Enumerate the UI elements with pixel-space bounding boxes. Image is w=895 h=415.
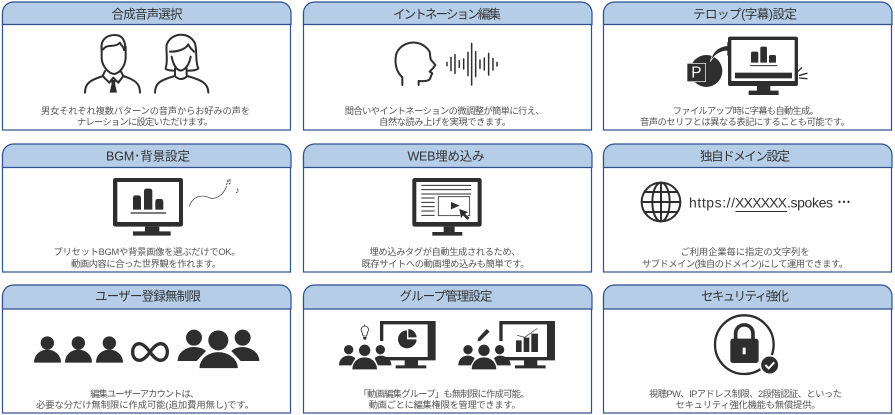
- heading: 独自ドメイン設定: [700, 150, 790, 164]
- icon: monitor with music notes: ♬: [225, 177, 234, 187]
- panel: ユーザー登録無制限: [2, 285, 291, 413]
- panel header: [2, 144, 291, 168]
- heading: グループ管理設定: [400, 288, 492, 304]
- heading: イントネーション編集: [393, 6, 501, 22]
- description: [640, 105, 850, 127]
- panel header: [604, 285, 892, 309]
- heading: テロップ(字幕)設定: [693, 8, 797, 22]
- description: サブドメイン(独自のドメイン)にして運用できます。: [642, 258, 848, 269]
- description: 必要な分だけ無制限に作成可能(追加費用無し)です。: [36, 399, 254, 410]
- description: セキュリティ強化機能も無償提供。: [676, 399, 820, 410]
- description: 音声のセリフとは異なる表記にすることも可能です。: [640, 116, 850, 127]
- panel header: [304, 2, 592, 24]
- description: [54, 246, 240, 269]
- description: 男女それぞれ複数パターンの音声からお好みの声を: [41, 105, 250, 116]
- panel header: [604, 144, 892, 168]
- description: [345, 105, 545, 127]
- icon: group with bar chart monitor: [458, 321, 555, 370]
- description: ナレーションに設定いただけます。: [77, 117, 213, 127]
- panel: テロップ（字幕）設定: [604, 2, 892, 130]
- icon: file to monitor with captions: [687, 37, 807, 95]
- description: [36, 388, 254, 410]
- icon: man and woman: [85, 35, 208, 93]
- domain url: [689, 194, 852, 212]
- panel: グループ管理設定: [304, 285, 592, 413]
- panel: 独自ドメイン設定: [604, 144, 892, 272]
- panel: 合成音声選択: [2, 2, 291, 130]
- description: 動画内容に合った世界観を作れます。: [71, 258, 221, 269]
- icon: monitor with music notes: ♪: [235, 185, 239, 195]
- panel header: [304, 144, 592, 168]
- description: 自然な読み上げを実現できます。: [379, 116, 511, 127]
- icon: monitor with embedded video: [412, 178, 482, 236]
- description: 編集ユーザーアカウントは、: [90, 388, 199, 399]
- panel: WEB埋め込み: [304, 144, 592, 272]
- description: 既存サイトへの動画埋め込みも簡単です。: [362, 258, 530, 269]
- icon: monitor with music notes: [113, 177, 239, 236]
- icon: group with pie chart monitor: [339, 321, 436, 370]
- description: 動画ごとに編集権限を管理できます。: [369, 399, 521, 410]
- icon: speaking head with waveform: [396, 42, 497, 85]
- domain url: ･･･: [836, 194, 852, 210]
- panel header: [2, 285, 291, 309]
- description: 「動画編集グループ」も無制限に作成可能。: [358, 388, 530, 399]
- description: [642, 246, 848, 269]
- panel: セキュリティ強化: [604, 285, 892, 413]
- description: ファイルアップ時に字幕も自動生成。: [673, 105, 819, 116]
- panel header: [604, 2, 892, 24]
- description: [358, 388, 530, 410]
- panel: イントネーション編集: [304, 2, 592, 130]
- icon: file to monitor with captions: P: [691, 65, 701, 82]
- panel header: [304, 285, 592, 309]
- description: 視聴PW、IPアドレス制限、2段階認証、といった: [649, 388, 842, 399]
- domain url: .spokes: [787, 194, 833, 210]
- icon: users and infinity: [34, 330, 259, 369]
- description: プリセットBGMや背景画像を選ぶだけでOK。: [54, 246, 240, 257]
- domain url: https://: [689, 194, 735, 210]
- heading: 合成音声選択: [112, 8, 183, 22]
- icon: globe: [642, 183, 680, 221]
- description: ご利用企業毎に指定の文字列を: [680, 246, 810, 257]
- description: 埋め込みタグが自動生成されるため、: [370, 246, 520, 257]
- description: [41, 105, 250, 127]
- panel: BGM・背景設定: [2, 144, 291, 272]
- heading: セキュリティ強化: [701, 290, 789, 304]
- domain url: XXXXXX: [735, 194, 788, 210]
- heading: BGM･背景設定: [106, 150, 190, 164]
- description: [649, 388, 842, 410]
- heading: ユーザー登録無制限: [95, 288, 201, 304]
- panel header: [2, 2, 291, 24]
- icon: lock with check badge: [715, 315, 779, 374]
- description: [362, 246, 530, 269]
- description: 間合いやイントネーションの微調整が簡単に行え、: [345, 105, 545, 116]
- heading: WEB埋め込み: [408, 150, 484, 164]
